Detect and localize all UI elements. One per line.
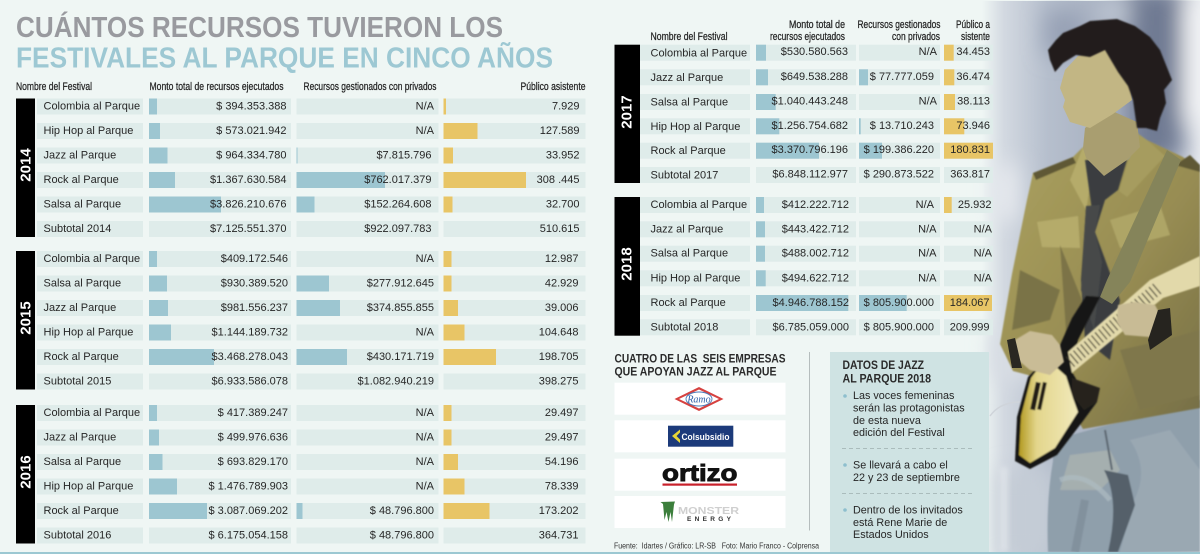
row: Hip Hop al Parque 2017: $1.256.754.682 — [772, 120, 848, 132]
right table header: Monto total de — [789, 19, 845, 31]
row: Salsa al Parque 2014: Salsa al Parque — [44, 198, 121, 210]
row: Hip Hop al Parque 2014 — [37, 123, 586, 139]
logo: Colsubsidio — [614, 420, 786, 452]
row: Colombia al Parque 2014: Colombia al Parque — [44, 100, 140, 112]
title: CUÁNTOS RECURSOS TUVIERON LOS — [16, 10, 503, 44]
year label 2016: 2016 — [18, 455, 34, 489]
row: Rock al Parque 2016: 173.202 — [539, 505, 578, 517]
row: Salsa al Parque 2017: $1.040.443.248 — [772, 96, 848, 108]
row: Colombia al Parque 2017: N/A — [919, 46, 938, 58]
row: Hip Hop al Parque 2016 — [37, 478, 586, 494]
man: face — [1060, 48, 1132, 128]
panel: year 2014 — [16, 98, 586, 237]
row: Rock al Parque 2015: $3.468.278.043 — [212, 351, 288, 363]
row: Subtotal 2014: 510.615 — [540, 223, 580, 235]
year label 2014: 2014 — [18, 148, 34, 182]
logo: Monster Energy: ENERGY — [687, 516, 732, 523]
logo: ortizo: ortizo — [662, 460, 738, 486]
row: Jazz al Parque 2016 — [37, 430, 586, 446]
row: Rock al Parque 2015: 198.705 — [539, 351, 578, 363]
row: Salsa al Parque 2015: 42.929 — [545, 278, 578, 290]
left table header: Recursos gestionados con privados — [304, 81, 437, 93]
row: Subtotal 2014: Subtotal 2014 — [44, 223, 111, 235]
row: Subtotal 2016: $ 48.796.800 — [370, 530, 434, 542]
row: Jazz al Parque 2014: 33.952 — [546, 150, 580, 162]
row: Rock al Parque 2017: 180.831 — [950, 144, 990, 156]
row: Jazz al Parque 2014: $7.815.796 — [376, 150, 432, 162]
row: Rock al Parque 2016: $ 3.087.069.202 — [208, 505, 288, 517]
row: Hip Hop al Parque 2014: Hip Hop al Parque — [44, 125, 133, 137]
row: Rock al Parque 2015 — [37, 349, 586, 365]
row: Hip Hop al Parque 2015: N/A — [416, 326, 435, 338]
year label 2018: 2018 — [618, 247, 636, 281]
panel: datos de Jazz al Parque 2018 — [830, 352, 989, 552]
man: hair — [1048, 19, 1172, 131]
row: Rock al Parque 2018: 184.067 — [950, 297, 990, 309]
row: Jazz al Parque 2018: N/A — [918, 223, 937, 235]
row: Jazz al Parque 2015: 39.006 — [545, 302, 578, 314]
panel: year 2015 — [16, 251, 586, 390]
man: t-shirt — [1081, 160, 1127, 360]
man: strap — [1100, 150, 1181, 304]
row: Hip Hop al Parque 2018: N/A — [918, 272, 937, 284]
row: Jazz al Parque 2017: Jazz al Parque — [650, 72, 723, 84]
row: Colombia al Parque 2016: N/A — [416, 407, 435, 419]
row: Jazz al Parque 2014: Jazz al Parque — [44, 150, 116, 162]
row: Jazz al Parque 2015: Jazz al Parque — [44, 302, 116, 314]
row: Salsa al Parque 2018 — [640, 246, 993, 262]
row: Jazz al Parque 2018: $443.422.712 — [782, 223, 849, 235]
row: Hip Hop al Parque 2018: Hip Hop al Parque — [650, 272, 740, 284]
title — [16, 10, 553, 74]
row: Rock al Parque 2014: $762.017.379 — [364, 174, 432, 186]
row: Colombia al Parque 2016: Colombia al Parque — [44, 407, 140, 419]
year label 2018 — [614, 197, 640, 336]
row: Colombia al Parque 2016: $ 417.389.247 — [218, 407, 288, 419]
row: Hip Hop al Parque 2017: Hip Hop al Parque — [650, 121, 740, 133]
logo: Colsubsidio: Colsubsidio — [682, 432, 730, 443]
row: Salsa al Parque 2018: N/A — [918, 248, 937, 260]
row: Colombia al Parque 2018: N/A — [916, 199, 935, 211]
row: Salsa al Parque 2016 — [37, 454, 586, 470]
logo: Ramo — [614, 383, 786, 415]
row: Jazz al Parque 2018: Jazz al Parque — [650, 223, 723, 235]
row: Hip Hop al Parque 2015: $1.144.189.732 — [212, 326, 288, 338]
photo: guitarist — [982, 0, 1200, 554]
man: fretting hand — [1117, 302, 1163, 337]
row: Colombia al Parque 2017: 34.453 — [956, 46, 990, 58]
row: Jazz al Parque 2016: $ 499.976.636 — [218, 432, 288, 444]
row: Subtotal 2018: $ 805.900.000 — [864, 321, 934, 333]
row: Hip Hop al Parque 2018: N/A — [974, 272, 993, 284]
row: Salsa al Parque 2014 — [37, 196, 586, 212]
logo: Ramo: Ramo — [686, 394, 711, 406]
row: Subtotal 2014: $922.097.783 — [364, 223, 432, 235]
fact: fechas: 22 y 23 de septiembre — [853, 472, 960, 484]
row: Salsa al Parque 2018: N/A — [974, 248, 993, 260]
row: Jazz al Parque 2017: 36.474 — [956, 71, 990, 83]
left table header: Público asistente — [520, 81, 586, 93]
row: Hip Hop al Parque 2016: N/A — [416, 480, 435, 492]
row: Salsa al Parque 2015: Salsa al Parque — [44, 278, 121, 290]
row: Salsa al Parque 2016: $ 693.829.170 — [218, 456, 288, 468]
row: Subtotal 2016 — [37, 528, 586, 544]
row: Jazz al Parque 2014 — [37, 148, 586, 164]
logo: ortizo — [614, 459, 786, 491]
panel heading: DATOS DE JAZZ — [842, 358, 924, 372]
row: Salsa al Parque 2017: 38.113 — [957, 96, 990, 108]
row: Rock al Parque 2018: Rock al Parque — [650, 297, 726, 309]
year label 2015: 2015 — [18, 301, 34, 335]
row: Rock al Parque 2014: 308 .445 — [537, 174, 580, 186]
row: Subtotal 2017: Subtotal 2017 — [650, 170, 718, 182]
sponsors heading: CUATRO DE LAS SEIS EMPRESAS — [614, 352, 786, 366]
row: Subtotal 2015: 398.275 — [539, 376, 578, 388]
row: Subtotal 2014: $7.125.551.370 — [210, 223, 286, 235]
row: Colombia al Parque 2015: 12.987 — [545, 253, 578, 265]
panel heading — [842, 358, 931, 386]
row: Subtotal 2016: Subtotal 2016 — [44, 530, 111, 542]
row: Subtotal 2015 — [37, 374, 586, 390]
row: Hip Hop al Parque 2014: $ 573.021.942 — [216, 125, 286, 137]
row: Rock al Parque 2016: $ 48.796.800 — [370, 505, 434, 517]
right table header: con privados — [892, 31, 940, 43]
guitar — [1015, 256, 1200, 469]
left table header: Monto total de recursos ejecutados — [150, 81, 284, 93]
row: Colombia al Parque 2017: $530.580.563 — [781, 46, 848, 58]
right table header — [650, 19, 991, 43]
row: Subtotal 2017: 363.817 — [950, 168, 990, 180]
row: Subtotal 2015: $6.933.586.078 — [212, 376, 288, 388]
row: Subtotal 2016: 364.731 — [539, 530, 578, 542]
row: Colombia al Parque 2014: N/A — [416, 100, 435, 112]
man: cuff — [1007, 338, 1022, 368]
row: Salsa al Parque 2014: $3.826.210.676 — [210, 198, 286, 210]
row: Salsa al Parque 2014: 32.700 — [546, 198, 580, 210]
right table header: Público a — [956, 19, 991, 31]
row: Rock al Parque 2014: $1.367.630.584 — [210, 174, 286, 186]
row: Hip Hop al Parque 2016: 78.339 — [545, 480, 578, 492]
row: Colombia al Parque 2014 — [37, 98, 586, 114]
row: Rock al Parque 2015: Rock al Parque — [44, 351, 119, 363]
fact: fechas — [843, 460, 960, 484]
fact: invitados: está Rene Marie de — [853, 517, 947, 529]
fact: invitados: Estados Unidos — [853, 529, 929, 541]
left table header: Nombre del Festival — [16, 81, 92, 93]
row: Hip Hop al Parque 2014: 127.589 — [540, 125, 580, 137]
row: Colombia al Parque 2018 — [640, 197, 993, 213]
row: Subtotal 2016: $ 6.175.054.158 — [208, 530, 288, 542]
row: Rock al Parque 2014 — [37, 172, 586, 188]
row: Jazz al Parque 2015: $374.855.855 — [367, 302, 434, 314]
row: Jazz al Parque 2018 — [640, 221, 993, 237]
row: Salsa al Parque 2016: Salsa al Parque — [44, 456, 121, 468]
row: Rock al Parque 2018: $ 805.900.000 — [864, 297, 934, 309]
fact: invitados: Dentro de los invitados — [853, 504, 963, 516]
row: Hip Hop al Parque 2014: N/A — [416, 125, 435, 137]
row: Colombia al Parque 2015: Colombia al Parque — [44, 253, 140, 265]
row: Jazz al Parque 2016: 29.497 — [545, 432, 578, 444]
divider — [809, 352, 810, 530]
row: Salsa al Parque 2017: N/A — [919, 96, 938, 108]
row: Salsa al Parque 2016: 54.196 — [545, 456, 578, 468]
row: Hip Hop al Parque 2015 — [37, 324, 586, 340]
man: jeans — [1048, 400, 1200, 552]
row: Salsa al Parque 2015 — [37, 276, 586, 292]
sponsors heading: QUE APOYAN JAZZ AL PARQUE — [614, 365, 776, 379]
row: Hip Hop al Parque 2016: $ 1.476.789.903 — [208, 480, 288, 492]
row: Hip Hop al Parque 2015: 104.648 — [539, 326, 578, 338]
fact: fechas: Se llevará a cabo el — [853, 460, 948, 472]
row: Subtotal 2018: $6.785.059.000 — [773, 321, 849, 333]
panel: year 2018 — [614, 197, 993, 336]
row: Rock al Parque 2014: Rock al Parque — [44, 174, 119, 186]
year label 2015 — [16, 251, 35, 390]
row: Colombia al Parque 2017: Colombia al Parque — [650, 48, 747, 60]
year label 2017: 2017 — [618, 95, 636, 129]
panel: year 2016 — [16, 405, 586, 544]
year label 2014 — [16, 98, 35, 237]
bottom strip — [0, 552, 1200, 554]
fact: voces femeninas: de esta nueva — [853, 415, 921, 427]
sponsors heading — [614, 352, 786, 379]
row: Subtotal 2017 — [640, 167, 993, 183]
source credit: Fuente: Idartes / Gráfico: LR-SB Foto: Mario Franco - Colprensa — [614, 542, 819, 551]
man: watch — [1148, 308, 1172, 350]
row: Colombia al Parque 2018: $412.222.712 — [782, 199, 849, 211]
row: Subtotal 2015: $1.082.940.219 — [358, 376, 434, 388]
row: Salsa al Parque 2017: Salsa al Parque — [650, 96, 728, 108]
title: FESTIVALES AL PARQUE EN CINCO AÑOS — [16, 40, 553, 74]
row: Jazz al Parque 2017: $649.538.288 — [781, 71, 848, 83]
row: Salsa al Parque 2018: Salsa al Parque — [650, 248, 728, 260]
row: Jazz al Parque 2015: $981.556.237 — [221, 302, 288, 314]
row: Rock al Parque 2017: $ 199.386.220 — [864, 144, 934, 156]
year label 2016 — [16, 405, 35, 544]
row: Colombia al Parque 2016 — [37, 405, 586, 421]
right table header: Recursos gestionados — [858, 19, 941, 31]
logo: Monster Energy — [614, 496, 786, 528]
row: Colombia al Parque 2014: $ 394.353.388 — [216, 100, 286, 112]
panel: year 2017 — [614, 45, 993, 183]
row: Subtotal 2018: Subtotal 2018 — [650, 321, 718, 333]
row: Salsa al Parque 2014: $152.264.608 — [364, 198, 432, 210]
row: Colombia al Parque 2015: N/A — [416, 253, 435, 265]
right table header: recursos ejecutados — [770, 31, 845, 43]
row: Hip Hop al Parque 2018: $494.622.712 — [782, 272, 849, 284]
row: Salsa al Parque 2015: $277.912.645 — [367, 278, 434, 290]
row: Salsa al Parque 2018: $488.002.712 — [782, 248, 849, 260]
row: Hip Hop al Parque 2017: 73.946 — [956, 120, 990, 132]
row: Subtotal 2018: 209.999 — [950, 321, 990, 333]
man: jacket — [1000, 133, 1200, 429]
fact: voces femeninas: Las voces femeninas — [853, 390, 955, 402]
row: Jazz al Parque 2017: $ 77.777.059 — [870, 71, 934, 83]
row: Jazz al Parque 2016: Jazz al Parque — [44, 432, 116, 444]
row: Rock al Parque 2016 — [37, 503, 586, 519]
photo background — [982, 0, 1200, 554]
row: Hip Hop al Parque 2017: $ 13.710.243 — [870, 120, 934, 132]
row: Hip Hop al Parque 2015: Hip Hop al Parque — [44, 326, 133, 338]
logo: Monster Energy: MONSTER — [678, 505, 739, 517]
row: Subtotal 2014 — [37, 221, 586, 237]
row: Jazz al Parque 2016: N/A — [416, 432, 435, 444]
right table header: sistente — [961, 31, 990, 43]
fact: voces femeninas: edición del Festival — [853, 427, 945, 439]
row: Subtotal 2018 — [640, 319, 993, 335]
row: Jazz al Parque 2014: $ 964.334.780 — [216, 150, 286, 162]
year label 2017 — [614, 45, 640, 183]
row: Colombia al Parque 2015: $409.172.546 — [221, 253, 288, 265]
man: neck — [1083, 110, 1140, 176]
row: Rock al Parque 2017: Rock al Parque — [650, 145, 726, 157]
row: Salsa al Parque 2017 — [640, 94, 993, 110]
row: Colombia al Parque 2016: 29.497 — [545, 407, 578, 419]
row: Salsa al Parque 2015: $930.389.520 — [221, 278, 288, 290]
row: Rock al Parque 2015: $430.171.719 — [367, 351, 434, 363]
row: Colombia al Parque 2018: Colombia al Parque — [650, 199, 747, 211]
fact: voces femeninas — [843, 390, 965, 439]
row: Rock al Parque 2018 — [640, 295, 993, 311]
row: Colombia al Parque 2018: 25.932 — [958, 199, 992, 211]
row: Salsa al Parque 2016: N/A — [416, 456, 435, 468]
row: Rock al Parque 2018: $4.946.788.152 — [773, 297, 849, 309]
row: Subtotal 2015: Subtotal 2015 — [44, 376, 111, 388]
row: Subtotal 2017: $6.848.112.977 — [772, 168, 848, 180]
row: Hip Hop al Parque 2016: Hip Hop al Parque — [44, 480, 133, 492]
panel heading: AL PARQUE 2018 — [842, 372, 931, 386]
fact: voces femeninas: serán las protagonistas — [853, 402, 965, 414]
row: Hip Hop al Parque 2018 — [640, 270, 993, 286]
row: Colombia al Parque 2014: 7.929 — [552, 100, 580, 112]
row: Rock al Parque 2016: Rock al Parque — [44, 505, 119, 517]
man: picking hand — [1015, 331, 1064, 375]
row: Rock al Parque 2017 — [640, 143, 993, 159]
row: Subtotal 2017: $ 290.873.522 — [864, 168, 934, 180]
row: Colombia al Parque 2017 — [640, 45, 993, 61]
row: Jazz al Parque 2015 — [37, 300, 586, 316]
left table header — [16, 81, 586, 93]
row: Hip Hop al Parque 2017 — [640, 118, 993, 134]
row: Colombia al Parque 2015 — [37, 251, 586, 267]
right table header: Nombre del Festival — [650, 31, 728, 43]
row: Jazz al Parque 2017 — [640, 69, 993, 85]
fact: invitados — [843, 504, 963, 541]
row: Jazz al Parque 2018: N/A — [974, 223, 993, 235]
row: Rock al Parque 2017: $3.370.796.196 — [772, 144, 848, 156]
